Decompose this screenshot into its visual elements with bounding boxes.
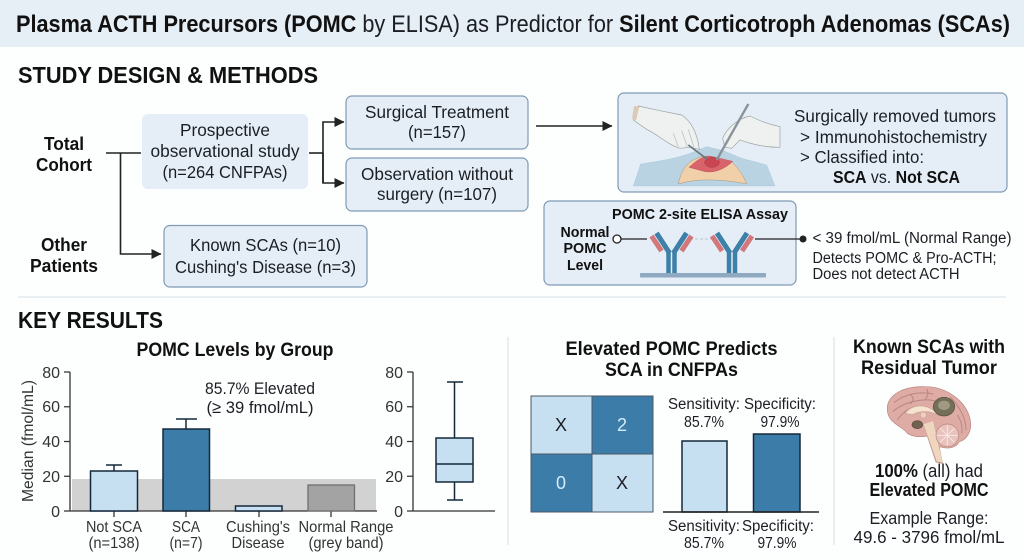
x axis labels: (grey band) [308,535,384,552]
label: other patients: Patients [30,255,98,276]
y axis: 0 [51,504,60,521]
bar: Cushing's disease [236,506,282,511]
title banner [0,0,1024,47]
bar: Not SCA [90,465,138,511]
chart: box plot: 60 [385,399,403,416]
text: tumor classification: Surgically removed tumors [794,106,996,126]
label: total cohort: Cohort [36,154,92,175]
heading: known SCAs with residual tumor: Residual Tumor [861,357,997,379]
y axis [20,365,70,521]
annotation: elevated share: 85.7% Elevated [205,379,315,398]
panel: surgically removed tumors [618,93,1007,192]
text: assay notes: Detects POMC & Pro-ACTH; [812,250,996,267]
box: prospective observational study: Prospective [180,120,270,140]
x axis labels: Not SCA [86,519,142,536]
icon: brain with tumors [887,387,971,463]
label: normal POMC level [560,224,610,274]
x axis labels: Normal Range [298,519,394,536]
chart: box plot: 20 [385,469,403,486]
box: observation without surgery: surgery (n=107) [377,184,497,204]
chart: sensitivity and specificity bars: Specificity: [742,518,814,535]
box: observation without surgery [346,158,528,211]
text: residual tumor result: 100% (all) had [875,460,983,481]
text: tumor classification: > Immunohistochemistry [800,127,987,147]
bar: normal range [308,485,354,511]
label: normal POMC level: Normal [560,224,610,241]
heading: elevated POMC predicts SCA: Elevated POMC Predicts [566,338,778,360]
text: tumor classification: > Classified into: [800,147,924,167]
text: assay notes: Does not detect ACTH [812,266,960,283]
heading: elevated POMC predicts SCA: SCA in CNFPAs [605,359,738,381]
x axis labels: SCA [172,519,200,536]
annotation: elevated share: (≥ 39 fmol/mL) [206,398,314,417]
bar: SCA [163,419,210,511]
box: known SCAs and Cushing's disease: Known SCAs (n=10) [190,235,341,255]
chart: confusion matrix: 0 [556,473,566,493]
chart: box plot: 40 [385,434,403,451]
flow connectors: study to treatment arms [309,122,344,183]
label: total cohort: Total [44,133,84,154]
label: normal POMC level: Level [567,257,603,274]
text: assay notes: < 39 fmol/mL (Normal Range) [812,230,1012,247]
label: other patients [30,234,98,276]
y axis: 60 [42,399,60,416]
label: total cohort [36,133,92,175]
text: residual tumor result: Example Range: [870,508,988,528]
box: known SCAs and Cushing's disease: Cushing's Disease (n=3) [175,257,356,277]
text: assay notes [800,230,1012,283]
chart: box plot [385,365,495,521]
label: other patients: Other [41,234,87,255]
text: tumor classification [794,106,996,187]
chart: confusion matrix: X [555,415,567,435]
chart title: POMC Levels by Group [136,339,334,361]
box: surgical treatment [346,96,528,149]
chart: box plot: 80 [385,365,403,382]
text: tumor classification: SCA vs. Not SCA [833,167,960,187]
label: normal POMC level: POMC [564,240,607,257]
chart: sensitivity and specificity bars: Sensitivity: [668,518,740,535]
chart: box plot: 0 [394,504,403,521]
y axis: 20 [42,469,60,486]
chart: confusion matrix: X [616,473,628,493]
y axis: Median (fmol/mL) [20,380,37,502]
box: surgical treatment: (n=157) [408,122,466,142]
x axis labels: Cushing's [226,519,290,536]
heading: elevated POMC predicts SCA [566,338,778,381]
x axis labels: (n=138) [88,535,140,552]
diagram: antibodies on plate [613,233,803,278]
y axis: 80 [42,365,60,382]
box: prospective observational study: (n=264 CNFPAs) [162,162,288,182]
x axis labels [86,519,394,552]
chart: sensitivity and specificity bars: 85.7% [684,535,724,552]
y axis: 40 [42,434,60,451]
annotation: elevated share [205,379,315,417]
text: residual tumor result: 49.6 - 3796 fmol/mL [854,527,1005,547]
arrow: surgery to tumor classification [536,125,612,127]
chart: sensitivity and specificity bars: 97.9% [758,535,797,552]
chart: sensitivity and specificity bars: 85.7% [684,414,724,431]
box: surgical treatment: Surgical Treatment [365,102,509,122]
flow connectors: cohort to study and other patients [106,153,161,254]
chart: POMC levels by group [20,339,394,552]
chart: sensitivity and specificity bars: 97.9% [760,414,800,431]
x axis labels: Disease [232,535,285,552]
box: known SCAs and Cushing's disease [164,226,367,287]
heading: known SCAs with residual tumor [853,336,1005,379]
heading: known SCAs with residual tumor: Known SCAs with [853,336,1005,358]
chart: sensitivity and specificity bars: Sensitivity: [668,396,740,413]
heading: study design and methods: STUDY DESIGN & METHODS [18,62,318,88]
text: residual tumor result: Elevated POMC [870,479,988,500]
chart: sensitivity and specificity bars: Specificity: [744,396,816,413]
box: observation without surgery: Observation without [361,164,513,184]
chart: sensitivity and specificity bars [663,396,819,552]
chart: confusion matrix [531,396,653,512]
title banner: Plasma ACTH Precursors (POMC by ELISA) as Predictor for Silent Corticotroph Adenomas (SCAs) [16,11,1010,38]
text: residual tumor result [854,460,1005,547]
box: prospective observational study: observational study [150,141,300,161]
panel: POMC ELISA assay [544,201,803,285]
icon: surgery illustration [632,104,780,186]
box: prospective observational study [142,114,308,189]
x axis labels: (n=7) [170,535,202,552]
heading: key results: KEY RESULTS [18,307,163,333]
panel: POMC ELISA assay: POMC 2-site ELISA Assay [612,206,789,223]
chart: confusion matrix: 2 [617,415,627,435]
